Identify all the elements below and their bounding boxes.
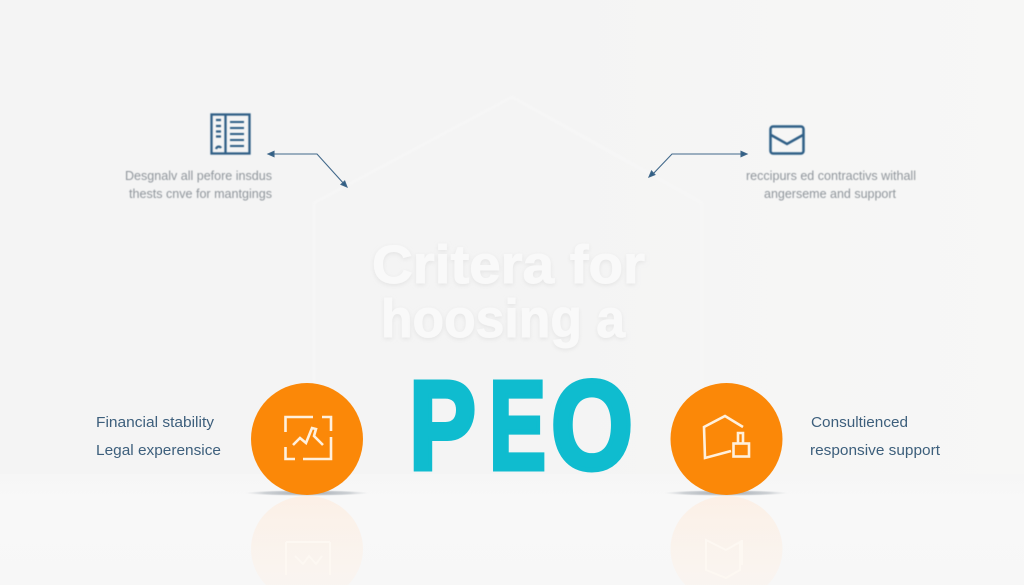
reflection: left circle [251,496,363,585]
text: right labels: Consultienced [811,414,908,431]
icon shadow: right [664,490,788,496]
icon: orange circle with house and lock [670,383,782,495]
text: left labels: Legal experensice [96,442,221,459]
icon: document list [212,114,250,154]
icon shadow: left [245,490,369,496]
panel: top right criterion [649,126,916,201]
text: top right description: reccipurs ed contractivs withall [746,169,916,183]
title: PEO: E [489,355,546,496]
title: PEO: O [551,355,633,496]
text: left labels [96,414,221,459]
panel: bottom left criterion [96,383,369,585]
title: PEO: P [409,355,476,496]
text: top left description: thests cnve for mantgings [129,187,272,201]
icon: orange circle with chart [251,383,363,495]
text: right labels [810,414,941,459]
text: left labels: Financial stability [96,414,215,431]
text: right labels: responsive support [810,442,941,459]
text: top left description: Desgnalv all pefore insdus [125,169,272,183]
text: top right description: angerseme and support [764,187,897,201]
title: faint heading: Critera for [372,235,645,295]
text: top left description [125,169,272,201]
panel: bottom right criterion [664,383,941,585]
faint house outline [314,97,702,470]
arrow: top left connector [268,151,347,187]
title: PEO [409,355,633,496]
arrow: top right connector [649,151,747,177]
title: faint heading [372,235,645,349]
title: faint heading: hoosing a [381,289,626,349]
text: top right description [746,169,916,201]
icon: envelope [770,126,804,154]
reflection: right circle [670,496,782,585]
panel: top left criterion [125,114,347,201]
